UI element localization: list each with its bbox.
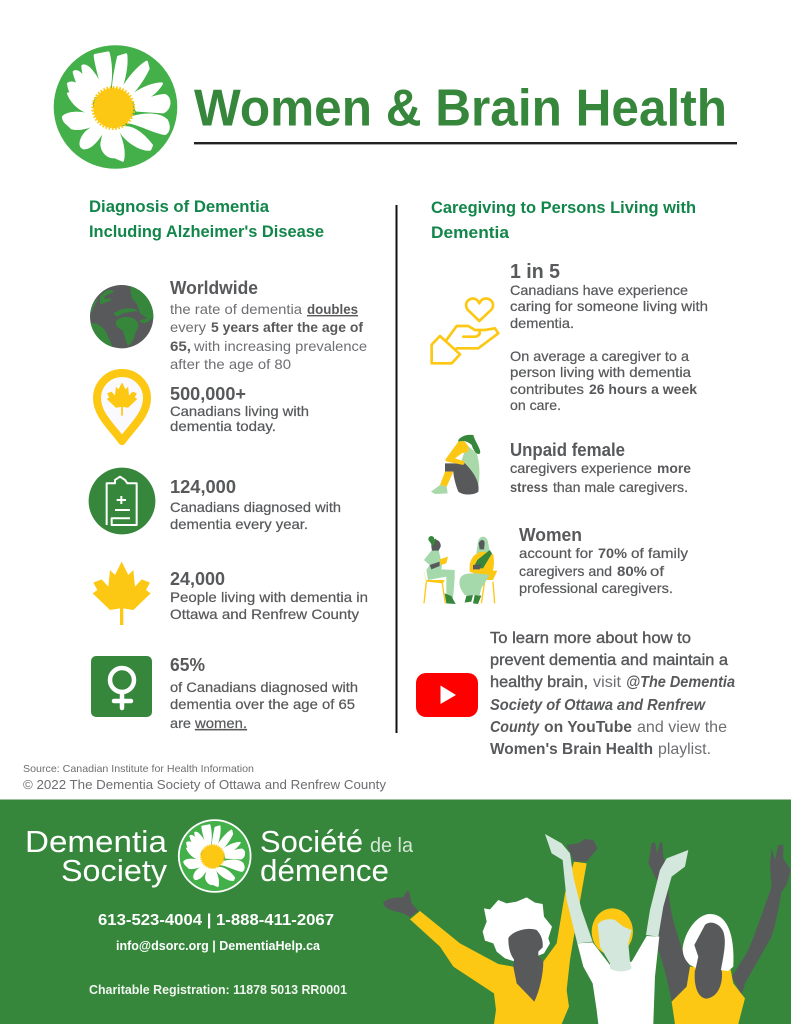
logo: dementia society wordmark: Society [61,853,168,888]
text: women: Women [519,525,582,545]
text: learn more: visit [593,674,622,691]
text: unpaid female: stress [510,479,548,495]
icon: female symbol [91,656,152,717]
text: worldwide: 65, [170,338,191,354]
text: 24,000 [170,569,368,622]
text: worldwide [170,278,367,372]
contact: phone: 613-523-4004 | 1-888-411-2067 [98,912,334,929]
text: 500,000+: dementia today. [170,418,276,434]
text: 1 in 5: Canadians have experience [510,282,688,298]
text: 500,000+: 500,000+ [170,384,246,404]
heading: diagnosis: Diagnosis of Dementia [89,197,270,216]
title rule [194,142,737,144]
logo: dementia society wordmark: Société [260,824,363,859]
source note: Source: Canadian Institute for Health Information [23,763,254,775]
heading: caregiving [431,198,696,242]
text: women [519,525,688,596]
logo: dementia society wordmark [25,819,414,893]
text: unpaid female: caregivers experience [510,460,652,476]
icon: clipboard [89,468,155,534]
panel: diagnosis of dementia [88,197,368,731]
text: learn more: prevent dementia and maintain a [490,652,728,669]
text: women: of family [631,545,688,561]
text: worldwide: doubles [307,301,358,317]
text: 65%: dementia over the age of 65 [170,696,355,712]
text: 65%: of Canadians diagnosed with [170,679,358,695]
text: 1 in 5: caring for someone living with [510,298,708,314]
icon: youtube [416,673,478,717]
logo: dementia society wordmark: de la [370,835,414,857]
text: unpaid female: more [657,460,691,476]
text: 1 in 5: On average a caregiver to a [510,348,689,364]
heading: diagnosis [89,197,324,241]
text: 24,000: Ottawa and Renfrew County [170,606,359,622]
text: unpaid female: than male caregivers. [553,479,688,495]
text: learn more: Society of Ottawa and Renfrew [490,697,706,714]
text: 24,000: 24,000 [170,569,225,589]
text: 124,000: 124,000 [170,477,236,497]
text: 24,000: People living with dementia in [170,589,368,605]
text: learn more: @The Dementia [626,674,735,691]
text: women: 70% [598,545,628,561]
text: 124,000 [170,477,341,532]
panel: caregiving [416,198,735,758]
source note: © 2022 The Dementia Society of Ottawa and Renfrew County [23,777,386,792]
text: women: 80% [617,563,648,579]
text: worldwide: the rate of dementia [170,301,302,317]
text: learn more: To learn more about how to [490,630,691,647]
text: worldwide: with increasing prevalence [193,338,367,354]
heading: caregiving: Dementia [431,223,510,242]
heading: caregiving: Caregiving to Persons Living with [431,198,696,217]
icon: stressed seated woman [431,435,480,495]
text: 65% [170,655,358,731]
icon: hand holding heart [432,299,498,363]
text: 1 in 5: 1 in 5 [510,261,560,283]
text: learn more [490,630,735,758]
charitable registration: Charitable Registration: 11878 5013 RR0001 [89,983,347,997]
text: learn more: County [490,719,540,736]
text: unpaid female [510,440,691,495]
text: worldwide: every [170,319,206,335]
text: 500,000+: Canadians living with [170,403,309,419]
icon: maple leaf [93,562,151,625]
text: learn more: on YouTube [544,719,632,736]
text: unpaid female: Unpaid female [510,440,625,460]
text: learn more: playlist. [658,741,711,758]
text: learn more: and view the [637,719,727,736]
text: worldwide: 5 years after the age of [211,319,363,335]
panel: footer [0,800,791,1024]
text: 1 in 5: on care. [510,397,561,413]
illustration: three women cheering [383,834,791,1024]
logo: dementia society wordmark: démence [260,853,389,888]
text: worldwide: after the age of 80 [170,356,291,372]
text: learn more: healthy brain, [490,674,588,691]
text: learn more: Women's Brain Health [490,741,653,758]
column divider [396,205,398,733]
text: women: professional caregivers. [519,580,673,596]
text: 65%: 65% [170,655,205,675]
text: 65%: are [170,715,191,731]
text: 1 in 5: dementia. [510,315,574,331]
text: women: of [650,563,664,579]
text: 124,000: Canadians diagnosed with [170,499,341,515]
contact: web: info@dsorc.org | DementiaHelp.ca [116,939,321,953]
text: 1 in 5: person living with dementia [510,364,691,380]
text: worldwide: Worldwide [170,278,258,298]
icon: globe [88,285,157,348]
text: 500,000+ [170,384,309,434]
source note [23,763,386,792]
title: Women & Brain Health [194,80,727,138]
icon: two women seated [423,536,497,604]
text: 1 in 5 [510,261,708,413]
logo: dementia society wordmark: Dementia [25,824,168,859]
text: women: account for [519,545,593,561]
text: 124,000: dementia every year. [170,516,308,532]
heading: diagnosis: Including Alzheimer's Disease [89,222,324,241]
text: 65%: women. [194,715,247,731]
text: 1 in 5: 26 hours a week [589,381,697,397]
logo: daisy in green circle [54,45,177,169]
text: 1 in 5: contributes [510,381,584,397]
icon: map pin with maple leaf [97,373,147,441]
text: women: caregivers and [519,563,612,579]
